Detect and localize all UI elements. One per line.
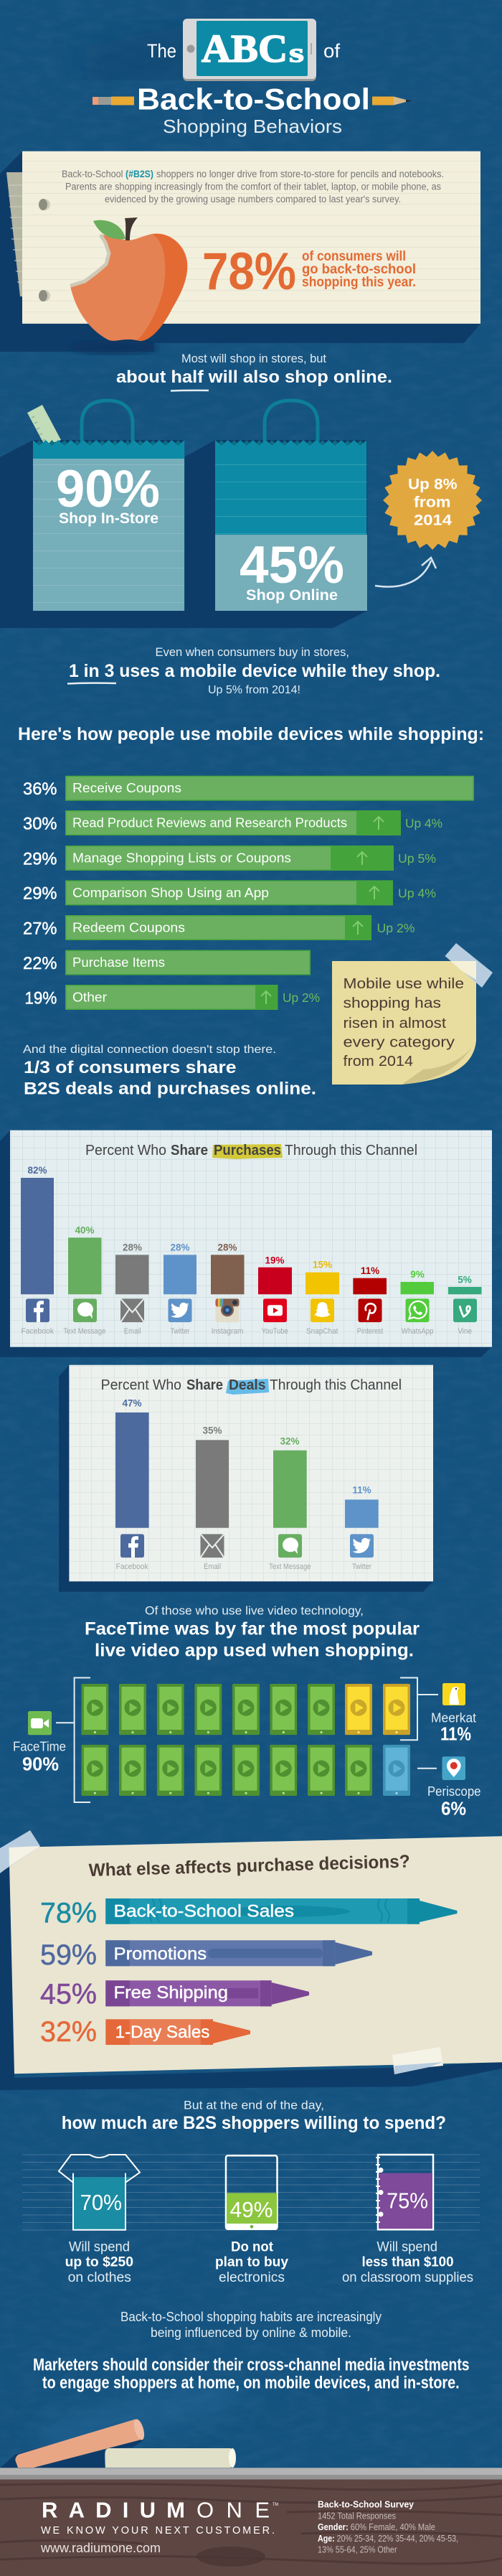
- bar: comparison shop: Comparison Shop Using an App: [72, 886, 269, 900]
- bar: Pinterest 11: [353, 1265, 387, 1336]
- bar: other: 19%: [24, 988, 57, 1008]
- icon: tape: [445, 943, 493, 988]
- text block: survey details: Age: 20% 25-34, 22% 35-44, 20% 45-53,: [318, 2533, 458, 2544]
- bar: Email 35: Email: [204, 1563, 221, 1571]
- bar: Text Message 40: [63, 1224, 105, 1336]
- icon: t-shirt 70 percent: [59, 2155, 140, 2230]
- bar: YouTube 19: [258, 1255, 292, 1336]
- bar: receive coupons: 36%: [23, 779, 57, 799]
- stat: Meerkat: Meerkat: [431, 1710, 476, 1725]
- text block: intro copy: [62, 169, 444, 205]
- bar: comparison shop: Up 4%: [398, 886, 436, 900]
- heading: willing to spend: how much are B2S shoppers willing to spend?: [62, 2113, 446, 2133]
- bar: Facebook 82: Facebook: [22, 1327, 54, 1336]
- text block: intro copy: Back-to-School: [62, 169, 123, 179]
- callout: sticky note: from 2014: [343, 1054, 413, 1069]
- heading: 1 in 3 mobile: [67, 645, 440, 696]
- stat: FaceTime: 90%: [22, 1753, 59, 1775]
- bar: Instagram 28: Instagram: [212, 1327, 243, 1336]
- bar: SnapChat 15: SnapChat: [306, 1327, 338, 1336]
- logo: RadiumOne: www.radiumone.com: [40, 2541, 161, 2555]
- title: Shopping Behaviors: [163, 116, 342, 137]
- heading: willing to spend: [62, 2098, 446, 2133]
- heading: share deals: [101, 1377, 402, 1395]
- panel: share deals chart: [59, 1365, 433, 1592]
- crayon: free shipping: 45%: [40, 1979, 97, 2010]
- stat: Meerkat: [431, 1683, 476, 1744]
- bar: Vine 5: [448, 1274, 482, 1336]
- bar: Email 28: 28%: [123, 1242, 142, 1252]
- title: of: [323, 40, 340, 62]
- stat: 78 percent: of consumers will: [302, 248, 406, 264]
- bar: Vine 5: Vine: [458, 1327, 472, 1336]
- phones row 1: [81, 1684, 410, 1735]
- text: clothes: on clothes: [68, 2270, 131, 2285]
- bar: read reviews: [23, 810, 442, 835]
- heading: share purchases: Percent Who: [85, 1143, 166, 1158]
- heading: share deals: Share: [186, 1377, 223, 1393]
- panel: intro notebook paper: [0, 151, 480, 354]
- panel: share purchases chart: [0, 1130, 492, 1357]
- icon: tape bottom-right: [392, 2047, 443, 2074]
- bar: Email 35: [196, 1425, 229, 1571]
- crayon: promotions: [40, 1939, 372, 1971]
- heading: live video: Of those who use live video technology,: [145, 1603, 364, 1617]
- callout: sticky note: Mobile use while: [343, 976, 464, 992]
- text block: digital connection: [23, 1044, 316, 1099]
- bar: Email 28: Email: [124, 1327, 141, 1336]
- bar: Pinterest 11: 11%: [361, 1265, 379, 1276]
- bar: WhatsApp 9: 9%: [410, 1269, 425, 1280]
- logo: RadiumOne: WE KNOW YOUR NEXT CUSTOMER.: [41, 2525, 275, 2537]
- heading: share deals: Deals: [229, 1377, 265, 1393]
- text block: intro copy: (#B2S): [126, 169, 153, 179]
- panel: shopping bags: [0, 401, 482, 628]
- bar: YouTube 19: YouTube: [262, 1327, 288, 1336]
- stat: Periscope: [427, 1756, 480, 1819]
- stat: 78 percent: go back-to-school: [302, 261, 416, 277]
- text: classroom supplies: Will spend: [376, 2240, 437, 2255]
- text: electronics: plan to buy: [215, 2255, 288, 2270]
- crayon: free shipping: Free Shipping: [113, 1983, 228, 2003]
- chart: spending icons: [22, 2155, 480, 2285]
- bag: online 45 percent: 45%: [240, 536, 344, 594]
- logo: RadiumOne: ONE: [196, 2498, 270, 2523]
- chalk tray: [0, 2468, 502, 2479]
- bar: SnapChat 15: [306, 1260, 339, 1336]
- bar: Instagram 28: 28%: [217, 1242, 237, 1252]
- badge: up 8 percent: from: [414, 495, 450, 511]
- crayon: 1-day sales: 1-Day Sales: [115, 2023, 209, 2042]
- icon: ruler: [27, 405, 61, 446]
- text block: intro copy: Parents are shopping increasingly from the comfort of their tablet, laptop, or mobile phone, as: [65, 181, 441, 192]
- bar: receive coupons: [23, 776, 474, 801]
- text: electronics: electronics: [219, 2270, 285, 2285]
- icon: pencil left half: [93, 96, 134, 105]
- bar: purchase items: Purchase Items: [72, 955, 165, 970]
- bar: redeem coupons: 27%: [23, 919, 57, 938]
- bar: Text Message 32: Text Message: [269, 1563, 311, 1571]
- bar: Instagram 28: [211, 1242, 244, 1336]
- icon: pencil right half: [372, 96, 412, 105]
- text block: closing: [33, 2310, 469, 2392]
- icon: tablet with ABCs: [183, 19, 316, 81]
- bar: Twitter 28: [164, 1242, 196, 1336]
- heading: live video: [85, 1603, 420, 1660]
- text: classroom supplies: less than $100: [361, 2255, 453, 2270]
- text: classroom supplies: [342, 2240, 473, 2285]
- bag: in-store 90 percent: 90%: [56, 460, 160, 518]
- bar: purchase items: [23, 950, 311, 975]
- text: clothes: up to $250: [65, 2255, 133, 2270]
- text block: survey details: [318, 2498, 458, 2555]
- crayon: back-to-school sales: [40, 1897, 458, 1929]
- heading: 1 in 3 mobile: Even when consumers buy in stores,: [155, 645, 349, 659]
- icon: tablet 49 percent: [226, 2155, 277, 2230]
- bar: receive coupons: Receive Coupons: [72, 781, 181, 795]
- logo: RadiumOne: RADIUM: [42, 2498, 185, 2523]
- crayon: promotions: 59%: [40, 1939, 97, 1971]
- text block: survey details: Back-to-School Survey: [318, 2498, 415, 2509]
- text block: intro copy: shoppers no longer drive from store-to-store for pencils and notebooks.: [156, 169, 444, 179]
- heading: share deals: Percent Who: [101, 1377, 181, 1393]
- stat: 78 percent: 78%: [202, 243, 296, 301]
- text block: digital connection: And the digital connection doesn't stop there.: [23, 1044, 276, 1056]
- heading: share purchases: [85, 1143, 417, 1159]
- title: [93, 19, 412, 137]
- text: classroom supplies: on classroom supplies: [342, 2270, 473, 2285]
- bar: Text Message 32: 32%: [280, 1435, 300, 1446]
- callout: sticky note: every category: [343, 1035, 455, 1051]
- bar: read reviews: Up 4%: [405, 816, 442, 830]
- bar: read reviews: 30%: [23, 814, 57, 833]
- text block: closing: being influenced by online & mobile.: [151, 2326, 351, 2340]
- text block: survey details: Gender: 60% Female, 40% Male: [318, 2521, 435, 2532]
- heading: share purchases: Purchases: [214, 1143, 281, 1158]
- crayon: 1-day sales: 32%: [40, 2016, 97, 2048]
- bar: Text Message 32: [269, 1435, 311, 1571]
- bar: Vine 5: 5%: [458, 1274, 472, 1285]
- bar: read reviews: Read Product Reviews and Research Products: [72, 815, 347, 830]
- bar: Facebook 82: 82%: [27, 1165, 47, 1176]
- pictogram: video app phones: [13, 1678, 480, 1819]
- bar: purchase items: 22%: [23, 954, 57, 973]
- callout: sticky note: risen in almost: [343, 1016, 446, 1031]
- heading: willing to spend: But at the end of the day,: [184, 2098, 324, 2112]
- bag: in-store 90 percent: Shop In-Store: [59, 510, 158, 527]
- text: clothes: [65, 2240, 133, 2285]
- bar: Facebook 82: [21, 1165, 54, 1336]
- text block: closing: Back-to-School shopping habits are increasingly: [120, 2310, 382, 2324]
- heading: 1 in 3 mobile: Up 5% from 2014!: [208, 684, 300, 696]
- heading: live video: live video app used when shopping.: [95, 1640, 414, 1660]
- icon: bitten apple: [70, 217, 187, 354]
- bar: Email 35: 35%: [202, 1425, 222, 1435]
- stat: 78 percent: shopping this year.: [302, 274, 416, 290]
- icon: tablet 49 percent: 49%: [229, 2197, 273, 2222]
- phones row 2: [81, 1745, 410, 1796]
- bar: Twitter 11: 11%: [352, 1485, 371, 1496]
- icon: tablet with ABCs: s: [289, 38, 304, 68]
- bar: Twitter 11: [345, 1485, 379, 1571]
- heading: share purchases: Share: [171, 1143, 208, 1158]
- badge: up 8 percent: [383, 451, 482, 550]
- bar: WhatsApp 9: WhatsApp: [402, 1327, 433, 1336]
- bar: manage lists: Manage Shopping Lists or Coupons: [72, 851, 291, 866]
- title: The: [147, 40, 176, 62]
- bar: manage lists: [23, 846, 436, 871]
- badge: up 8 percent: 2014: [414, 512, 452, 529]
- logo: RadiumOne: [40, 2498, 278, 2555]
- bar: Facebook 47: [115, 1397, 149, 1571]
- bar: comparison shop: [23, 880, 436, 905]
- stat: FaceTime: [13, 1711, 66, 1775]
- panel: purchase decisions paper: [0, 1830, 502, 2090]
- bag: online 45 percent: [215, 401, 367, 611]
- icon: tape top-left: [0, 1830, 40, 1873]
- callout: sticky note: [332, 943, 493, 1085]
- heading: shop online: [116, 352, 392, 390]
- bag: online 45 percent: Shop Online: [246, 587, 338, 604]
- bar: Twitter 11: Twitter: [352, 1563, 371, 1571]
- crayon: back-to-school sales: 78%: [40, 1897, 97, 1929]
- stat: FaceTime: FaceTime: [13, 1739, 66, 1753]
- bar: YouTube 19: 19%: [265, 1255, 285, 1266]
- bar: other: [24, 985, 320, 1010]
- stat: 78 percent: [202, 243, 416, 301]
- text block: digital connection: 1/3 of consumers share: [24, 1058, 237, 1077]
- callout: sticky note: shopping has: [343, 996, 441, 1011]
- bar: manage lists: 29%: [23, 849, 57, 868]
- footer: wood desk: [0, 2479, 502, 2576]
- badge: up 8 percent: Up 8%: [408, 477, 458, 493]
- bar: WhatsApp 9: [400, 1269, 434, 1336]
- bar: Twitter 28: Twitter: [171, 1327, 190, 1336]
- heading: live video: FaceTime was by far the most popular: [85, 1619, 420, 1639]
- bar: Facebook 47: Facebook: [116, 1563, 148, 1571]
- bar: other: Other: [72, 990, 107, 1005]
- bar: manage lists: Up 5%: [398, 851, 436, 866]
- bag: in-store 90 percent: [33, 401, 184, 611]
- text block: intro copy: evidenced by the growing usage numbers compared to last year's survey.: [105, 194, 401, 205]
- heading: shop online: Most will shop in stores, but: [181, 352, 326, 365]
- bar: SnapChat 15: 15%: [313, 1260, 332, 1270]
- stat: Periscope: Periscope: [427, 1784, 480, 1799]
- bar chart: mobile use while shopping: [23, 776, 474, 1010]
- arrow: chalk arrow to badge: [375, 558, 436, 587]
- crayon: 1-day sales: [40, 2016, 250, 2048]
- bar: other: Up 2%: [283, 990, 320, 1005]
- stat: Meerkat: 11%: [440, 1723, 471, 1744]
- crayon: promotions: Promotions: [113, 1944, 207, 1964]
- bar: redeem coupons: [23, 915, 415, 940]
- bar: Facebook 47: 47%: [122, 1397, 142, 1408]
- heading: share deals: Through this Channel: [270, 1377, 402, 1393]
- icon: notebook 75 percent: 75%: [387, 2188, 428, 2214]
- bar: Pinterest 11: Pinterest: [357, 1327, 383, 1336]
- icon: notebook 75 percent: [378, 2155, 433, 2229]
- text: electronics: Do not: [231, 2240, 274, 2255]
- text: electronics: [215, 2240, 288, 2285]
- title: Back-to-School: [137, 83, 370, 116]
- heading: mobile device use: Here's how people use mobile devices while shopping:: [18, 724, 484, 744]
- text block: digital connection: B2S deals and purchases online.: [24, 1079, 316, 1099]
- crayon: free shipping: [40, 1979, 309, 2010]
- text: clothes: Will spend: [69, 2240, 130, 2255]
- heading: share purchases: Through this Channel: [285, 1143, 417, 1158]
- logo: RadiumOne: TM: [273, 2503, 278, 2507]
- text block: survey details: 1452 Total Responses: [318, 2510, 396, 2521]
- bar: redeem coupons: Redeem Coupons: [72, 920, 185, 935]
- bar: Email 28: [115, 1242, 149, 1336]
- icon: tablet with ABCs: ABC: [202, 27, 288, 70]
- bar: Twitter 28: 28%: [170, 1242, 190, 1252]
- bar: redeem coupons: Up 2%: [377, 921, 415, 935]
- heading: what else affects: What else affects purchase decisions?: [88, 1851, 410, 1881]
- heading: shop online: about half will also shop online.: [116, 367, 392, 387]
- text block: survey details: 13% 55-64, 25% Other: [318, 2544, 397, 2555]
- heading: 1 in 3 mobile: 1 in 3 uses a mobile device while they shop.: [69, 661, 440, 681]
- bar: comparison shop: 29%: [23, 884, 57, 904]
- bar: Text Message 40: 40%: [75, 1224, 95, 1235]
- icon: t-shirt 70 percent: 70%: [80, 2190, 122, 2215]
- crayon: back-to-school sales: Back-to-School Sales: [113, 1902, 294, 1921]
- icon: chalk pieces: [0, 2418, 236, 2468]
- bar: Text Message 40: Text Message: [63, 1327, 105, 1336]
- stat: Periscope: 6%: [441, 1797, 466, 1819]
